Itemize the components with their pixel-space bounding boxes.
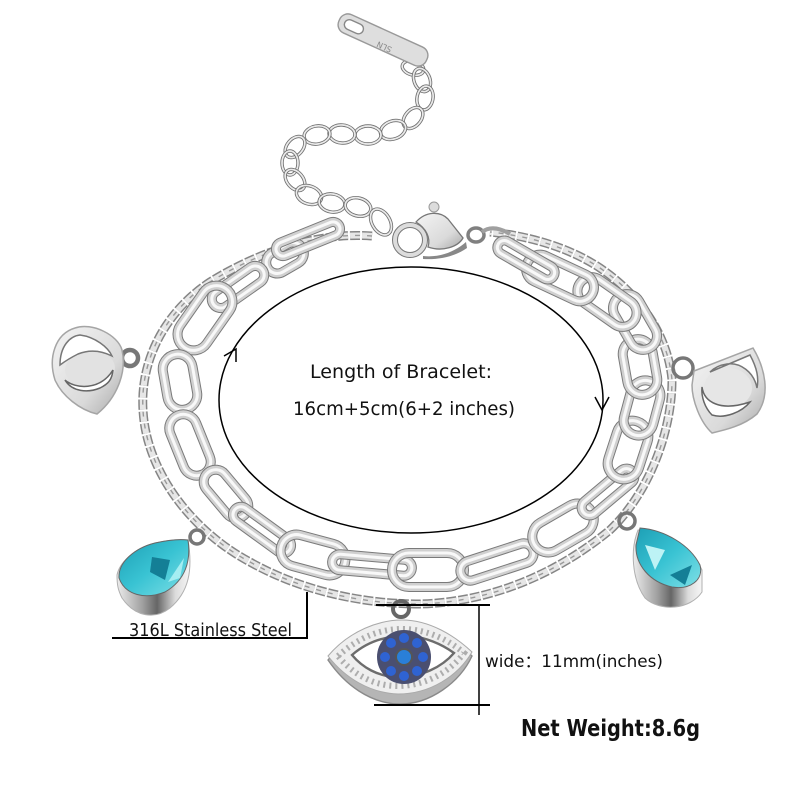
extender chain [281, 58, 435, 239]
length label: Length of Bracelet: [310, 361, 492, 383]
left shield charm [52, 327, 138, 414]
width dimension callout: wide：11mm(inches) [485, 652, 663, 671]
large oval link chain [160, 220, 664, 587]
material callout [112, 592, 307, 641]
right teardrop crystal charm [619, 513, 702, 607]
curb chain strand [143, 232, 672, 604]
extender end tag [335, 11, 431, 69]
lobster clasp [395, 202, 510, 259]
extender end tag: SLN [375, 39, 393, 54]
left teardrop crystal charm [117, 530, 204, 615]
evil eye charm with rhinestones [328, 601, 472, 704]
width dimension callout [374, 605, 663, 715]
right shield charm [673, 348, 765, 433]
bracelet length oval with arrows [219, 267, 609, 533]
net weight label: Net Weight:8.6g [521, 716, 700, 742]
length label: 16cm+5cm(6+2 inches) [293, 398, 515, 420]
material callout: 316L Stainless Steel [129, 620, 292, 641]
length label [293, 361, 515, 420]
